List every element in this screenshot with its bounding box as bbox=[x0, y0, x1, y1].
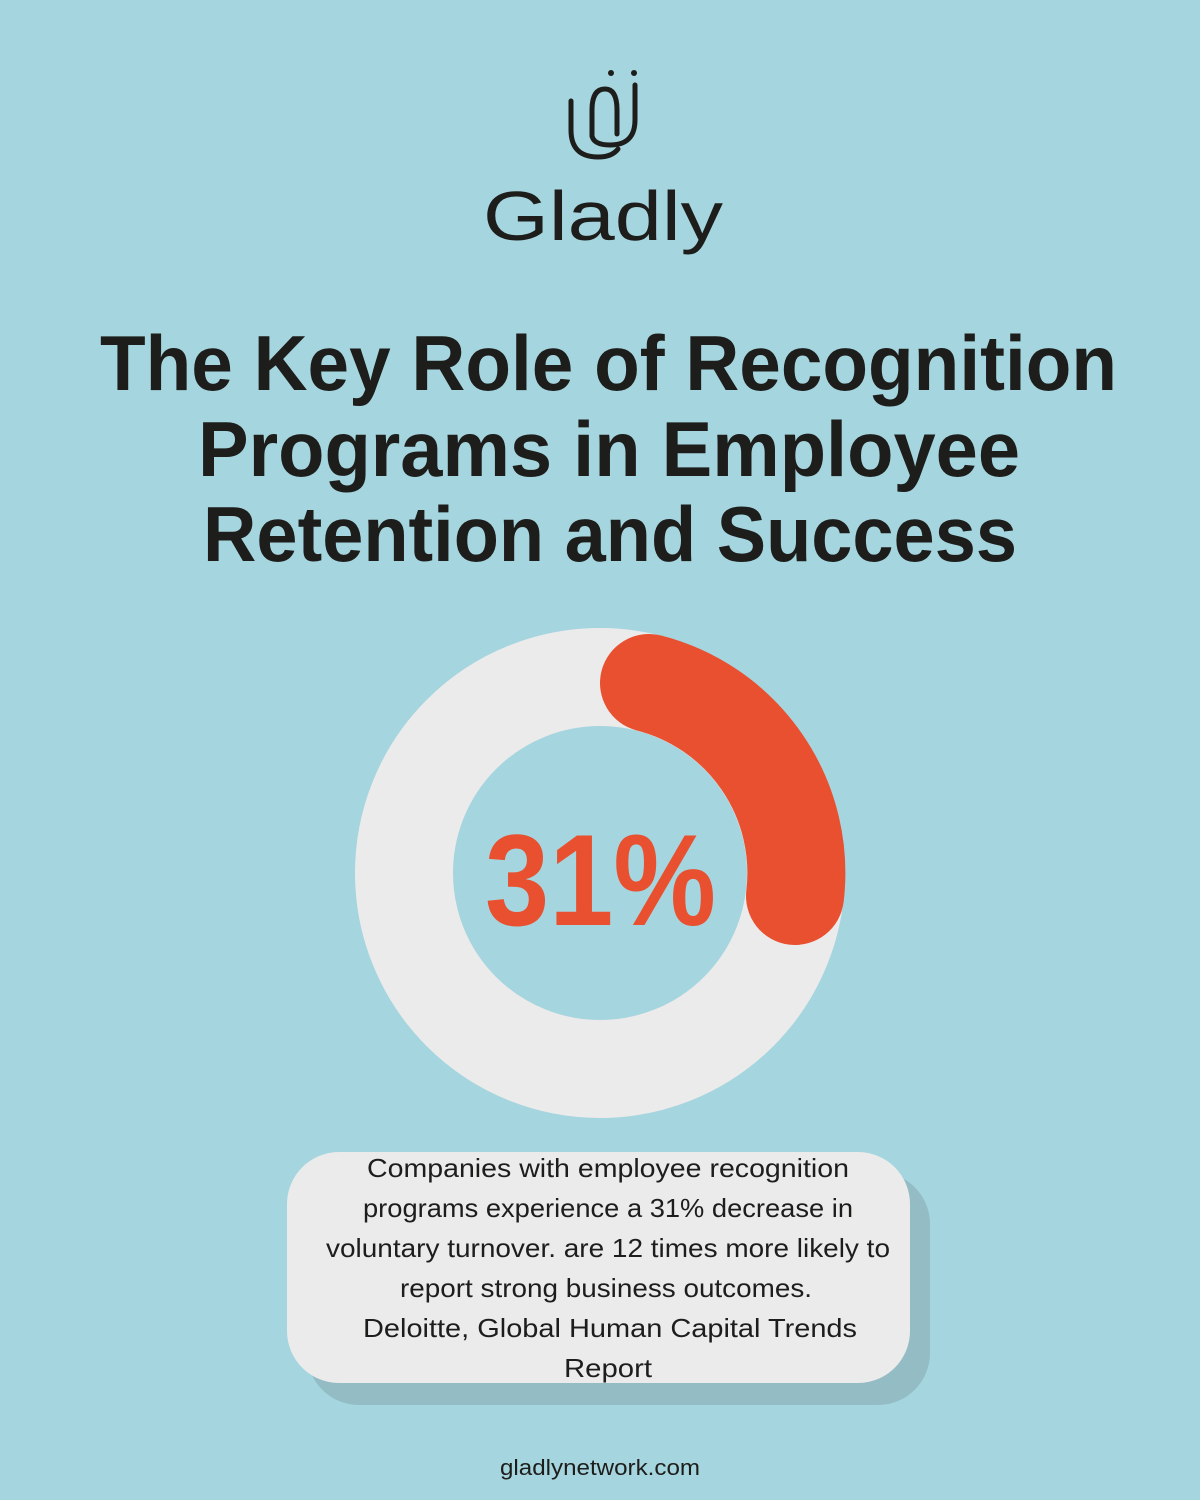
donut chart bbox=[404, 677, 796, 1069]
callout card: Deloitte, Global Human Capital Trends bbox=[363, 1313, 857, 1343]
callout card bbox=[287, 1152, 930, 1405]
brand name: Gladly bbox=[483, 177, 723, 255]
callout card: Companies with employee recognition bbox=[367, 1153, 849, 1183]
callout card: programs experience a 31% decrease in bbox=[363, 1193, 853, 1223]
callout card: report strong business outcomes. bbox=[400, 1273, 812, 1303]
callout card: voluntary turnover. are 12 times more likely to bbox=[326, 1233, 890, 1263]
logo icon bbox=[571, 70, 637, 157]
footer url: gladlynetwork.com bbox=[500, 1455, 700, 1480]
title: Programs in Employee bbox=[198, 405, 1020, 493]
title: Retention and Success bbox=[203, 490, 1017, 578]
title: The Key Role of Recognition bbox=[100, 319, 1117, 407]
title bbox=[100, 319, 1117, 578]
callout card: Report bbox=[564, 1353, 653, 1383]
percentage: 31% bbox=[485, 807, 716, 953]
